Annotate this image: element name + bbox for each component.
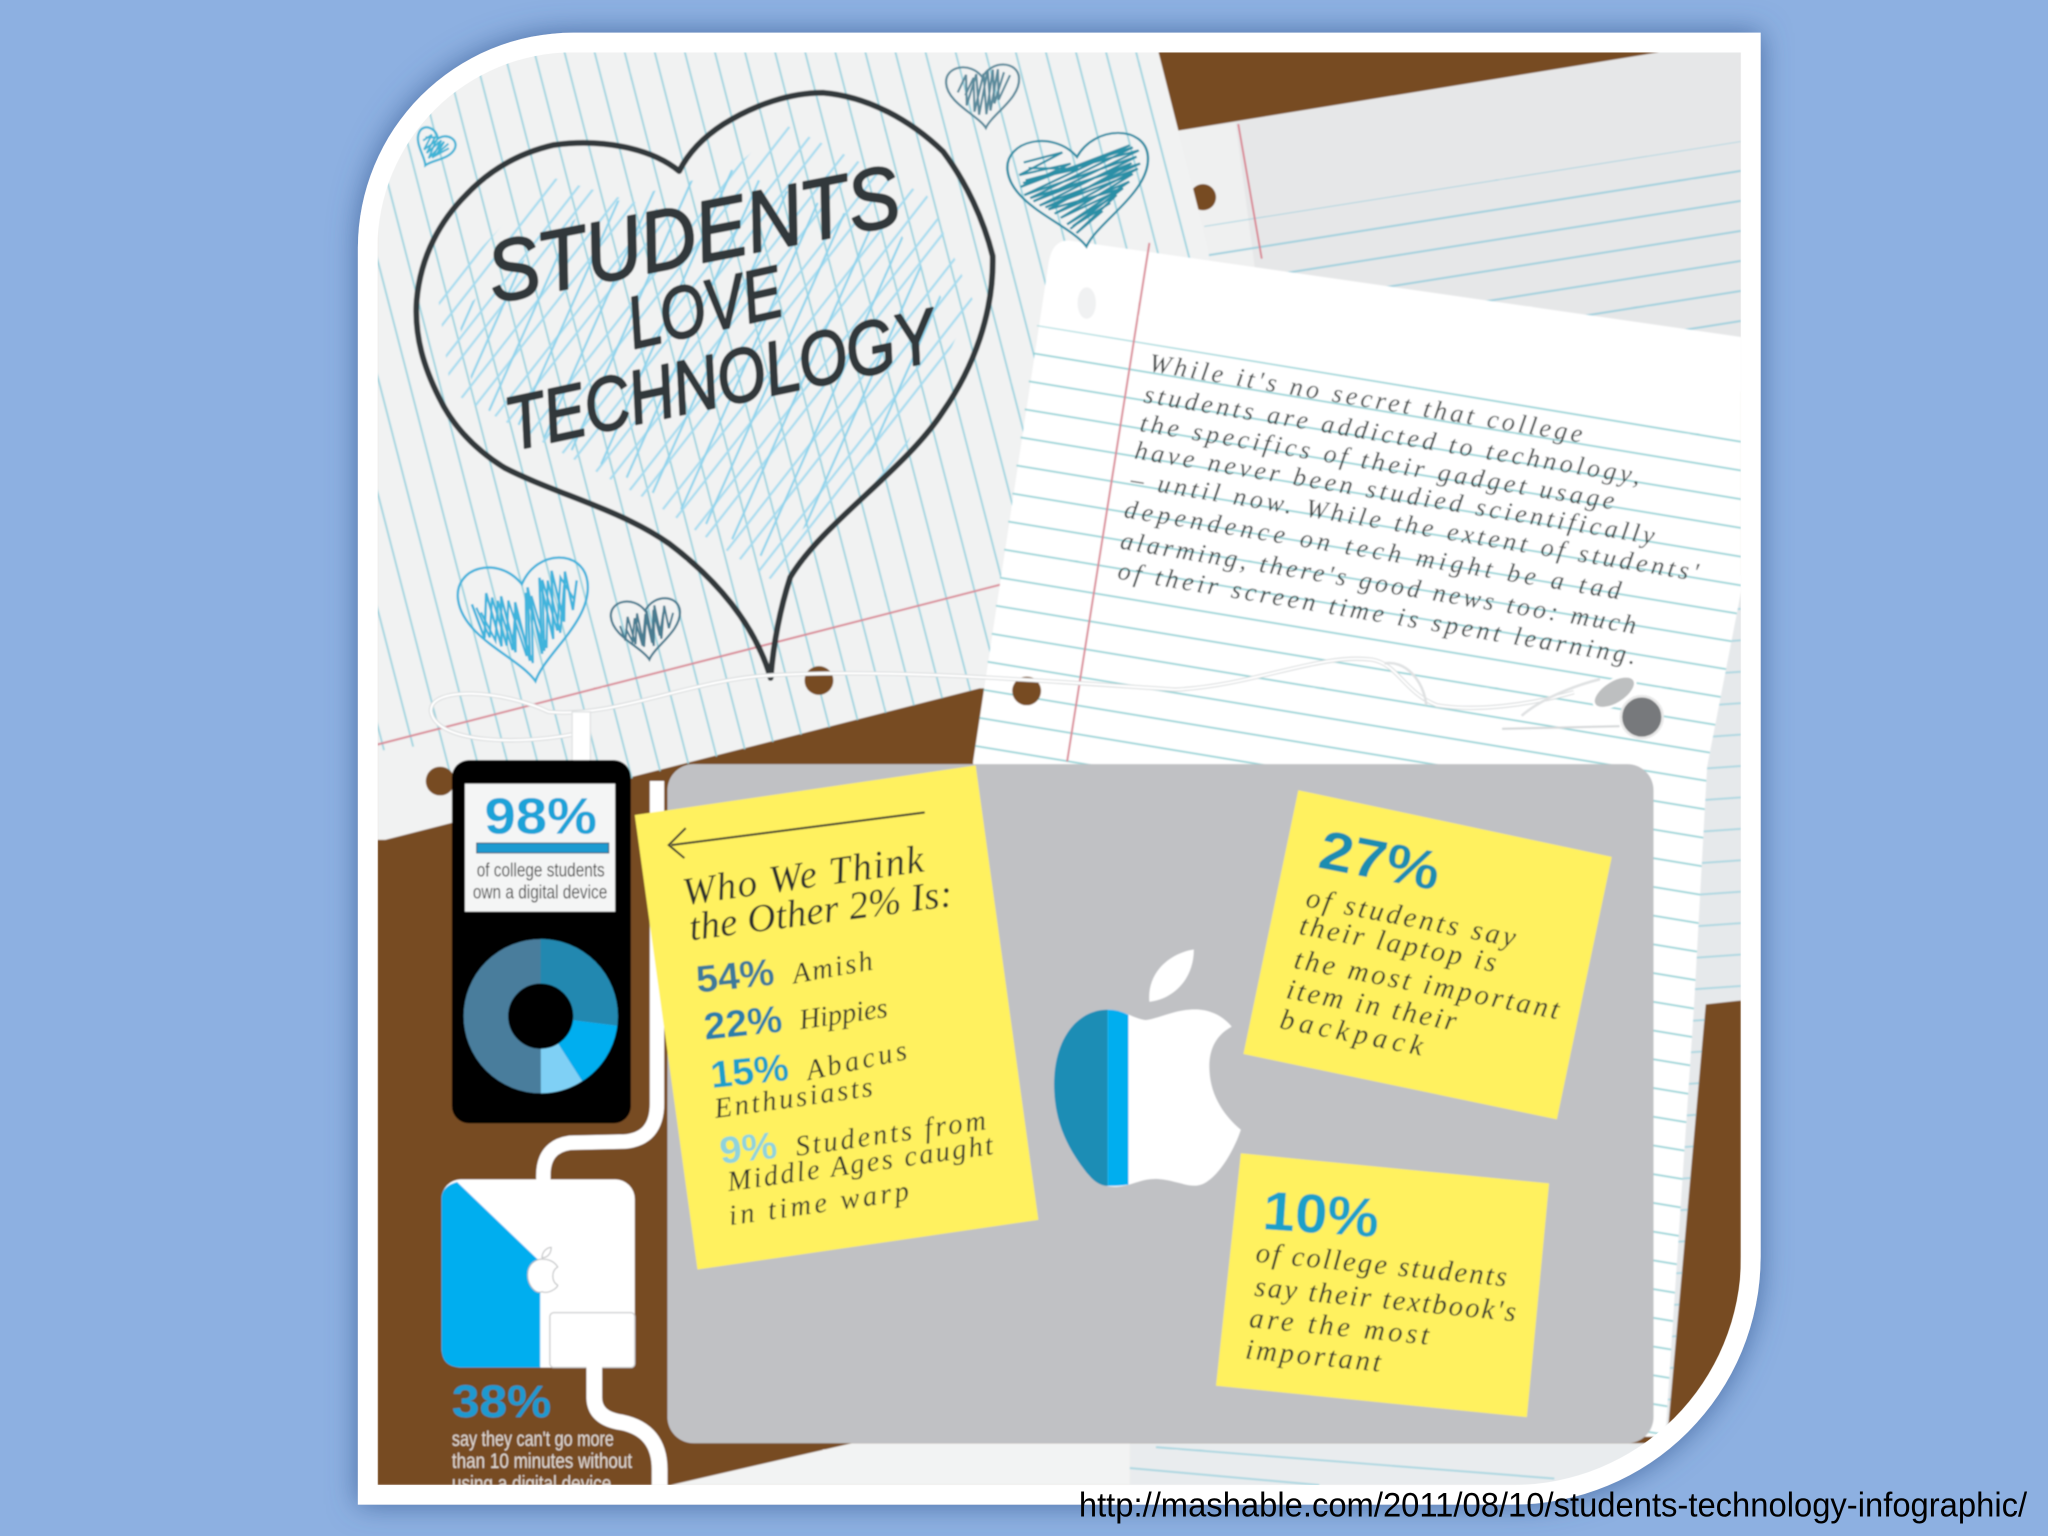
stat: 15%: Abacus: [801, 1035, 910, 1087]
icon: earbud light: [1588, 670, 1641, 715]
sticky note: 10%: [1216, 1153, 1549, 1417]
sticky heading: Who We Think: [680, 838, 927, 914]
stat: 9%: 9%: [718, 1125, 779, 1173]
front note paper: [953, 240, 1741, 1437]
10% text: are the most: [1248, 1302, 1431, 1352]
stat: 15%: [708, 1035, 910, 1125]
stat: 22%: Hippies: [796, 992, 890, 1036]
charger cable: to bottom: [594, 1366, 660, 1485]
stat: 9%: in time warp: [727, 1175, 911, 1232]
stat: 9%: Middle Ages caught: [724, 1129, 996, 1198]
10% text: [1244, 1237, 1518, 1379]
38% caption: using a digital device: [452, 1472, 611, 1495]
earphones: [431, 659, 1663, 764]
charger brick: [441, 1179, 635, 1368]
iPod: [452, 760, 631, 1123]
white rounded frame: [358, 33, 1761, 1505]
38% stat: [452, 1376, 632, 1495]
sticky heading: [680, 838, 955, 949]
27% text: [1277, 882, 1563, 1063]
wooden desk: [377, 52, 1741, 1485]
arrow: [669, 812, 925, 858]
third paper: right edge: [1665, 592, 1742, 1426]
note paragraph: [1116, 348, 1701, 670]
27% text: item in their: [1284, 973, 1460, 1038]
38% stat: 38%: [452, 1376, 551, 1427]
note paragraph: – until now. While the extent of students': [1128, 464, 1701, 587]
note paragraph: dependence on tech might be a tad: [1122, 495, 1624, 605]
note paragraph: have never been studied scientifically: [1133, 436, 1657, 550]
sticky heading: the Other 2% Is:: [687, 872, 955, 949]
27% stat: 27%: [1314, 818, 1445, 902]
stat: 9%: Students from: [793, 1104, 988, 1163]
heart scribble: [438, 124, 973, 588]
10% text: of college students: [1255, 1237, 1509, 1293]
10% stat: 10%: [1261, 1179, 1381, 1249]
sticky note: 27%: [1243, 790, 1612, 1119]
icon: small dark heart: [610, 597, 684, 662]
heart paper: [377, 52, 1254, 840]
stat: 54%: 54%: [694, 952, 776, 1002]
iPod caption: of college students: [477, 859, 605, 881]
title: [491, 166, 935, 450]
38% caption: say they can't go more: [452, 1428, 614, 1451]
source url: http://mashable.com/2011/08/10/students-technology-infographic/: [1079, 1486, 2028, 1524]
27% text: the most important: [1292, 943, 1563, 1026]
stat: 54%: Amish: [788, 945, 875, 991]
iPod caption: [473, 859, 607, 904]
back paper: top right: [1178, 52, 1742, 338]
sticky note: who we think: [635, 765, 1038, 1270]
icon: earbud dark: [1621, 696, 1663, 738]
10% text: important: [1244, 1333, 1383, 1379]
27% text: of students say: [1303, 882, 1519, 954]
laptop lid: [667, 764, 1654, 1443]
98% stat: 98%: [485, 787, 597, 844]
icon: top heart: [945, 63, 1022, 130]
stat: 54%: [694, 945, 875, 1002]
charger cable: iPod to charger: [543, 781, 657, 1183]
note paragraph: While it's no secret that college: [1147, 348, 1585, 449]
note paragraph: of their screen time is spent learning.: [1116, 556, 1639, 670]
iPod caption: own a digital device: [473, 882, 607, 904]
27% text: backpack: [1277, 1003, 1427, 1063]
27% text: their laptop is: [1297, 909, 1499, 979]
desk scene: [377, 52, 1741, 1495]
10% text: say their textbook's: [1253, 1271, 1518, 1328]
stat: 15%: 15%: [708, 1047, 791, 1097]
stat: 22%: [702, 992, 890, 1049]
stat: 15%: Enthusiasts: [711, 1071, 875, 1125]
icon: small apple: [528, 1247, 558, 1292]
note paragraph: students are addicted to technology,: [1142, 380, 1643, 490]
icon: right teal heart: [1005, 130, 1157, 254]
progress bar: [477, 843, 609, 853]
stat: 22%: 22%: [702, 999, 784, 1049]
stat: 9%: [718, 1104, 996, 1232]
donut chart: [486, 961, 596, 1071]
38% caption: [452, 1428, 632, 1495]
icon: blue heart: [454, 554, 600, 690]
38% caption: than 10 minutes without: [452, 1450, 632, 1473]
title: STUDENTS: [479, 148, 908, 322]
note paragraph: alarming, there's good news too: much: [1118, 526, 1639, 640]
note paragraph: the specifics of their gadget usage: [1138, 408, 1617, 515]
bottom paper: [670, 1443, 1741, 1485]
title: TECHNOLOGY: [498, 292, 948, 467]
apple logo: [1054, 950, 1241, 1187]
big heart outline: [416, 93, 993, 678]
icon: tiny heart: [408, 125, 458, 174]
title: LOVE: [619, 251, 791, 364]
